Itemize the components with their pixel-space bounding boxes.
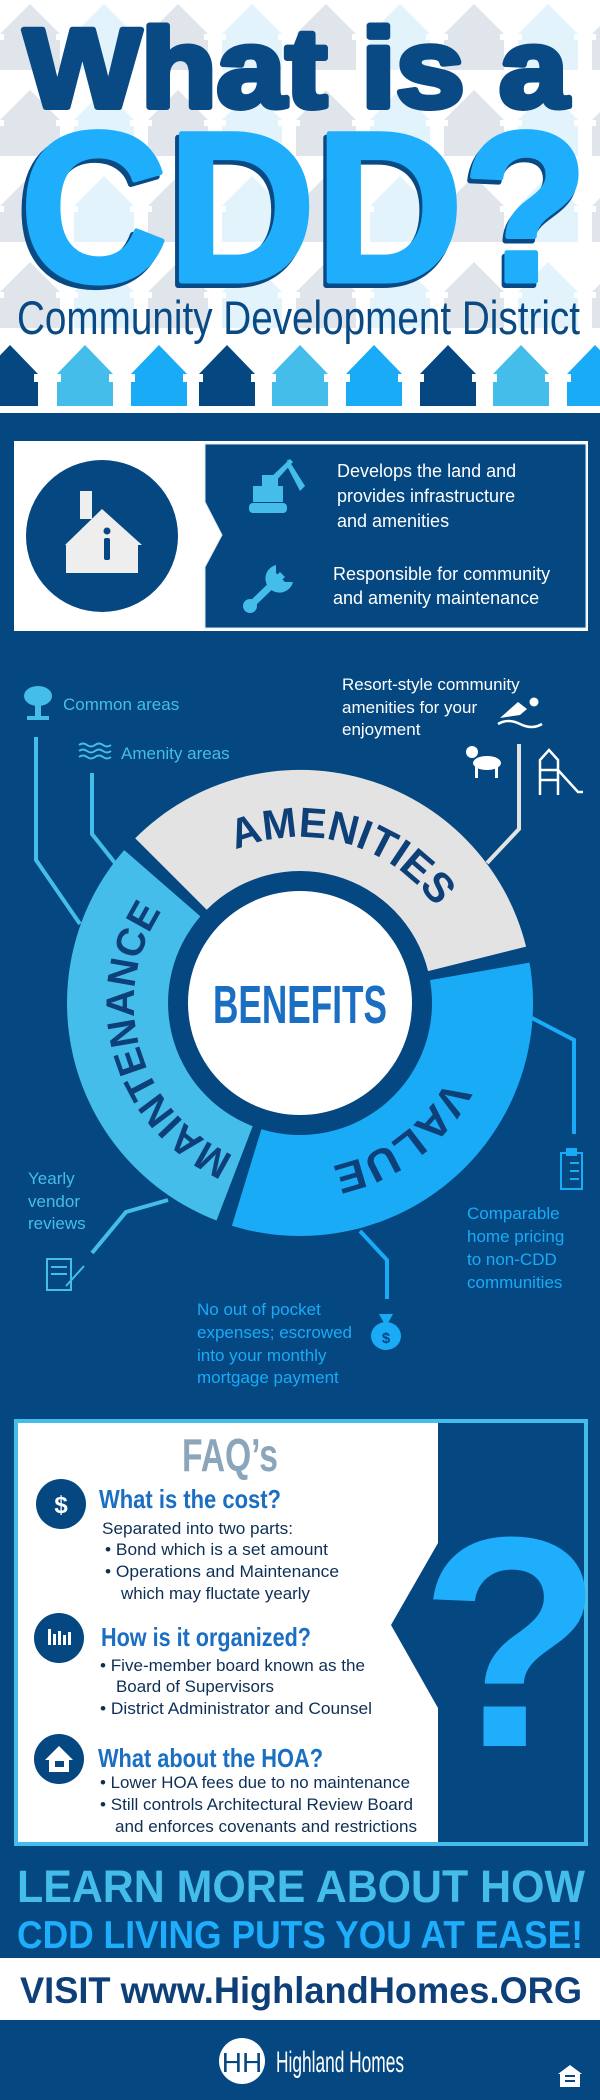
faq: cost: • Bond which is a set amount bbox=[105, 1540, 328, 1559]
icon: tree bbox=[24, 686, 52, 720]
text: no out of pocket: expenses; escrowed bbox=[197, 1323, 352, 1342]
text: resort-style amenities: Resort-style community bbox=[342, 675, 520, 694]
visit band: VISIT www.HighlandHomes.ORG bbox=[20, 1970, 582, 2011]
visit band bbox=[0, 1958, 600, 2020]
icon: dollar circle bbox=[36, 1479, 86, 1529]
icon: contract bbox=[47, 1259, 84, 1290]
segment: maintenance: MAINTENANCE bbox=[106, 900, 232, 1179]
chart: benefits ring bbox=[67, 770, 533, 1236]
text: common areas: Common areas bbox=[63, 695, 179, 714]
faq: organized: How is it organized? bbox=[101, 1622, 311, 1652]
brand name: Highland Homes bbox=[276, 2046, 404, 2079]
icon: dog bbox=[466, 746, 501, 778]
faq: cost: which may fluctate yearly bbox=[120, 1584, 310, 1603]
title: CDD?: CDD? bbox=[16, 92, 586, 331]
faq: organized: Board of Supervisors bbox=[116, 1677, 274, 1696]
text: benefits: BENEFITS bbox=[213, 975, 387, 1035]
icon: wrench bbox=[243, 565, 293, 613]
text: develops the land: and amenities bbox=[337, 511, 449, 531]
text: no out of pocket: No out of pocket bbox=[197, 1300, 321, 1319]
icon: money bag bbox=[371, 1314, 401, 1350]
segment: amenities: AMENITIES bbox=[236, 808, 454, 902]
text: responsible for maintenance: and amenity maintenance bbox=[333, 588, 539, 608]
text: no out of pocket: into your monthly bbox=[197, 1346, 327, 1365]
icon: home circle bbox=[34, 1734, 84, 1784]
text: no out of pocket bbox=[197, 1300, 352, 1387]
text: develops the land bbox=[337, 461, 516, 531]
icon: clipboard bbox=[561, 1149, 582, 1189]
icon: slide bbox=[540, 750, 583, 795]
icon: dollar circle: $ bbox=[54, 1492, 68, 1519]
text: comparable home pricing bbox=[467, 1204, 564, 1292]
icon: house info circle bbox=[26, 460, 178, 612]
faq: organized bbox=[100, 1622, 372, 1718]
footer bbox=[0, 2020, 600, 2100]
text: resort-style amenities bbox=[342, 675, 520, 739]
text: yearly vendor reviews: vendor bbox=[28, 1192, 80, 1211]
icon: chart circle bbox=[34, 1613, 84, 1663]
faq: HOA: and enforces covenants and restrictions bbox=[115, 1817, 417, 1836]
segment: maintenance bbox=[67, 850, 253, 1220]
icon: big question mark: ? bbox=[419, 1474, 600, 1810]
heading: FAQ's: FAQ’s bbox=[182, 1429, 278, 1481]
text: no out of pocket: mortgage payment bbox=[197, 1368, 339, 1387]
text: resort-style amenities: amenities for your bbox=[342, 698, 477, 717]
call to action bbox=[17, 1861, 585, 1957]
icon: equal housing bbox=[558, 2065, 582, 2087]
logo bbox=[219, 2038, 265, 2084]
panel: FAQ bbox=[16, 1421, 600, 1844]
text: responsible for maintenance: Responsible for community bbox=[333, 564, 550, 584]
faq: organized: • Five-member board known as the bbox=[100, 1656, 365, 1675]
icon: water waves bbox=[79, 744, 111, 758]
icon: money bag: $ bbox=[382, 1330, 391, 1347]
panel: what a CDD does bbox=[14, 441, 588, 631]
faq: cost: • Operations and Maintenance bbox=[105, 1562, 339, 1581]
text: comparable home pricing: to non-CDD bbox=[467, 1250, 557, 1269]
text: responsible for maintenance bbox=[333, 564, 550, 608]
text: yearly vendor reviews: reviews bbox=[28, 1214, 86, 1233]
text: yearly vendor reviews bbox=[28, 1169, 86, 1233]
icon: excavator bbox=[249, 459, 305, 513]
navy background bbox=[0, 413, 600, 1958]
text: develops the land: provides infrastructure bbox=[337, 486, 515, 506]
faq: HOA: • Still controls Architectural Review Board bbox=[100, 1795, 413, 1814]
faq: organized: • District Administrator and Counsel bbox=[100, 1699, 372, 1718]
center circle bbox=[188, 891, 412, 1115]
connector lines bbox=[36, 737, 574, 1299]
text: yearly vendor reviews: Yearly bbox=[28, 1169, 75, 1188]
faq: cost bbox=[99, 1484, 339, 1603]
house row bbox=[0, 345, 600, 406]
segment: value bbox=[232, 962, 533, 1236]
text: comparable home pricing: Comparable bbox=[467, 1204, 560, 1223]
text: comparable home pricing: communities bbox=[467, 1273, 562, 1292]
faq: HOA: What about the HOA? bbox=[98, 1743, 323, 1773]
faq: HOA: • Lower HOA fees due to no maintenance bbox=[100, 1773, 410, 1792]
title: CDD?: CDD? bbox=[20, 88, 588, 327]
segment: value: VALUE bbox=[334, 1089, 473, 1194]
header background pattern bbox=[0, 0, 600, 345]
logo: HH bbox=[222, 2047, 262, 2078]
title: What is a: What is a bbox=[24, 6, 569, 131]
icon: swimmer bbox=[498, 698, 542, 727]
faq: cost: Separated into two parts: bbox=[102, 1519, 293, 1538]
faq: HOA bbox=[98, 1743, 417, 1836]
text: comparable home pricing: home pricing bbox=[467, 1227, 564, 1246]
segment: amenities bbox=[135, 770, 526, 972]
call to action: LEARN MORE ABOUT HOW bbox=[17, 1861, 585, 1912]
faq: cost: What is the cost? bbox=[99, 1484, 281, 1514]
text: amenity areas: Amenity areas bbox=[121, 744, 230, 763]
text: develops the land: Develops the land and bbox=[337, 461, 516, 481]
text: resort-style amenities: enjoyment bbox=[342, 720, 421, 739]
